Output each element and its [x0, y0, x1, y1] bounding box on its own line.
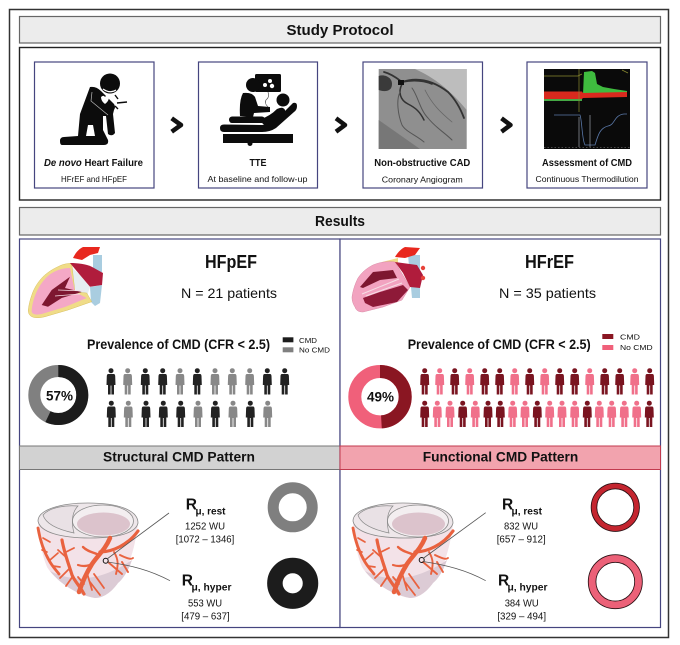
title: HFrEF: HFrEF — [525, 252, 574, 272]
panel: HFpEF — [20, 239, 340, 628]
banner: structural CMD pattern: Structural CMD Pattern — [103, 450, 255, 465]
label: R hyper: μ, hyper — [192, 582, 232, 594]
text: N = 35 patients: N = 35 patients — [499, 285, 596, 301]
text: non-obstructive CAD: Non-obstructive CAD — [374, 158, 470, 169]
image: coronary angiogram — [379, 69, 467, 149]
heading: prevalence of CMD: Prevalence of CMD (CFR < 2.5) — [408, 336, 591, 352]
text: TTE — [208, 158, 308, 184]
arrow — [336, 118, 345, 132]
arrow — [502, 118, 510, 132]
illustration: HFrEF heart — [352, 247, 425, 312]
label: R hyper: R — [498, 573, 509, 590]
text: non-obstructive CAD: Coronary Angiogram — [382, 174, 463, 184]
text: de novo heart failure: HFrEF and HFpEF — [61, 174, 127, 184]
label: R rest — [176, 496, 234, 545]
vessel ring: rest — [273, 488, 312, 527]
label: R hyper: [329 – 494] — [497, 611, 546, 622]
text: de novo heart failure — [44, 158, 143, 184]
label: R rest: [657 – 912] — [497, 534, 546, 545]
heading: Results: Results — [315, 213, 365, 230]
vessel ring: hyper — [275, 566, 311, 601]
heading: Results — [20, 208, 660, 235]
legend — [283, 336, 331, 354]
label: R hyper: R — [182, 573, 193, 590]
text: N = 21 patients: N = 21 patients — [181, 285, 277, 301]
card: de novo heart failure — [34, 62, 154, 188]
label: R rest: μ, rest — [512, 506, 542, 518]
panel: HFrEF — [340, 239, 660, 628]
text: TTE: At baseline and follow-up — [208, 174, 308, 184]
label: R rest: 832 WU — [504, 521, 538, 532]
chart: continuous thermodilution trace — [544, 69, 630, 149]
label: R hyper — [497, 573, 548, 622]
title: HFpEF: HFpEF — [205, 252, 257, 272]
icon: kneeling person coughing — [60, 74, 127, 145]
vessel ring: hyper — [592, 558, 638, 605]
text: assessment of CMD: Continuous Thermodilution — [536, 174, 639, 184]
callout lines — [103, 513, 170, 581]
banner: functional CMD pattern — [340, 446, 660, 470]
card: TTE — [198, 62, 318, 188]
card: assessment of CMD — [527, 62, 647, 188]
label: R hyper — [181, 573, 232, 622]
icon: echocardiography on patient — [220, 74, 297, 146]
donut chart: 57% — [34, 371, 82, 419]
legend: CMD — [299, 336, 318, 345]
card: non-obstructive CAD — [363, 62, 482, 188]
vessel ring: rest — [594, 486, 637, 529]
donut chart: 49%: 49% — [367, 388, 395, 404]
illustration: HFpEF heart — [28, 247, 103, 318]
illustration: heart with coronary microvasculature — [353, 503, 453, 598]
arrow — [172, 118, 181, 132]
label: R rest — [497, 496, 546, 545]
label: R rest: μ, rest — [196, 506, 226, 518]
text: de novo heart failure: De novo Heart Failure — [44, 158, 143, 169]
label: R hyper: 553 WU — [188, 599, 222, 610]
text: non-obstructive CAD — [374, 158, 470, 184]
label: R rest: 1252 WU — [185, 521, 225, 532]
label: R hyper: 384 WU — [505, 599, 539, 610]
heading: Study Protocol — [20, 16, 660, 43]
label: R hyper: μ, hyper — [508, 582, 548, 594]
panel: study protocol — [20, 48, 660, 200]
label: R rest: R — [502, 496, 513, 514]
pictogram: HFpEF patients — [106, 368, 289, 427]
banner: structural CMD pattern — [20, 446, 340, 470]
label: R rest: R — [186, 496, 197, 514]
banner: functional CMD pattern: Functional CMD Pattern — [423, 450, 578, 465]
heading: prevalence of CMD: Prevalence of CMD (CFR < 2.5) — [87, 336, 270, 352]
callout lines — [419, 513, 486, 581]
text: TTE: TTE — [250, 158, 267, 169]
donut chart: 49% — [355, 372, 405, 422]
text: assessment of CMD — [536, 158, 639, 184]
legend: No CMD — [620, 343, 653, 352]
donut chart: 57%: 57% — [46, 388, 74, 404]
heading: Study Protocol: Study Protocol — [286, 22, 394, 39]
label: R hyper: [479 – 637] — [181, 611, 230, 622]
illustration: heart with coronary microvasculature — [38, 503, 138, 598]
legend: No CMD — [299, 346, 331, 354]
pictogram: HFrEF patients — [420, 368, 654, 427]
text: assessment of CMD: Assessment of CMD — [542, 158, 632, 169]
legend: CMD — [620, 332, 641, 342]
label: R rest: [1072 – 1346] — [176, 534, 234, 545]
legend — [602, 332, 653, 352]
